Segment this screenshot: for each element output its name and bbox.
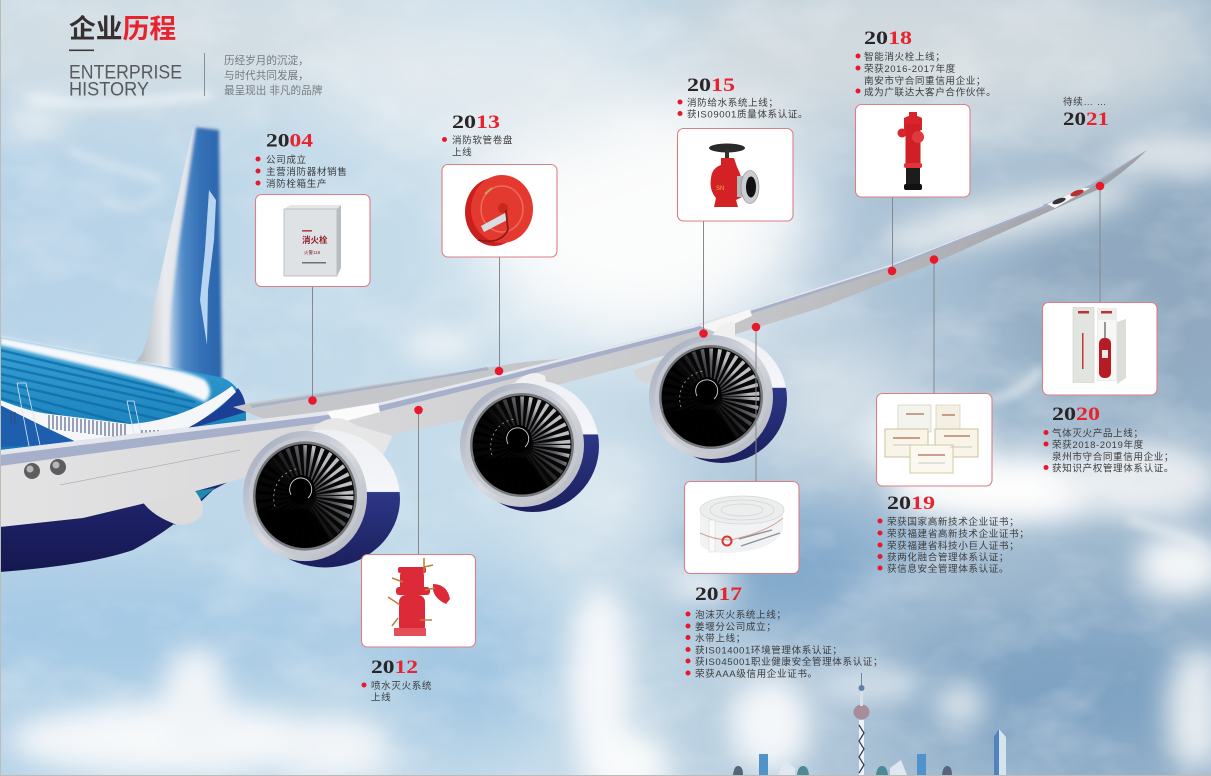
details 2018: 成为广联达大客户合作伙伴。 [864, 86, 996, 98]
english heading: HISTORY [69, 78, 149, 100]
city skyline [733, 673, 1006, 775]
details 2020: 获知识产权管理体系认证。 [1052, 462, 1174, 474]
slogan: 与时代共同发展， [224, 69, 309, 82]
year 2012: 20 12 [371, 658, 418, 678]
details 2019: 荣获福建省高新技术企业证书； [887, 528, 1029, 540]
card: deluge valve [362, 554, 476, 647]
fuselage [0, 337, 246, 455]
slogan [224, 54, 323, 97]
card: fire hose [684, 482, 799, 574]
details 2015: 消防给水系统上线； [687, 97, 779, 109]
details 2013 [442, 134, 513, 158]
details 2018: 智能消火栓上线； [864, 51, 945, 63]
details 2017 [686, 609, 883, 680]
engine 1 [243, 418, 400, 568]
windows [11, 412, 170, 438]
year 2004: 20 04 [266, 132, 313, 152]
details 2017: 获IS014001环境管理体系认证； [695, 644, 842, 656]
slogan: 历经岁月的沉淀， [224, 54, 309, 67]
far wing section [233, 358, 570, 432]
english heading [69, 62, 182, 100]
details 2019: 获两化融合管理体系认证； [887, 552, 1009, 564]
title block [69, 14, 323, 100]
details 2017: 获IS045001职业健康安全管理体系认证； [695, 656, 883, 668]
details 2012: 喷水灭火系统 [371, 680, 432, 692]
details 2017: 泡沫灭火系统上线； [695, 609, 787, 621]
milestone 2017 [684, 323, 883, 680]
details 2020: 荣获2018-2019年度 [1052, 439, 1144, 451]
year 2019: 20 19 [887, 494, 935, 514]
doors [17, 383, 143, 446]
fuselage underside [0, 470, 250, 572]
details 2017: 姜堰分公司成立； [695, 621, 776, 633]
card: hydrant cabinet: 火警119 [304, 249, 321, 256]
tail fin [133, 125, 222, 380]
card: certificates [876, 394, 992, 486]
card: hose reel [442, 164, 557, 257]
details 2018: 南安市守合同重信用企业； [864, 75, 986, 87]
details 2018: 荣获2016-2017年度 [864, 63, 956, 75]
milestone 2004 [256, 132, 370, 405]
milestone 2018 [856, 29, 996, 275]
card: outdoor hydrant [856, 104, 970, 197]
year 2015: 20 15 [687, 76, 735, 96]
milestone 2021 [1063, 96, 1109, 302]
details 2013: 上线 [452, 146, 472, 158]
milestone 2019 [876, 255, 1029, 575]
milestone 2015 [678, 76, 808, 338]
details 2012 [362, 680, 432, 704]
details 2019: 获信息安全管理体系认证。 [887, 563, 1009, 575]
slogan: 最呈现出 非凡的品牌 [224, 84, 323, 97]
card: fire valve [678, 128, 793, 221]
details 2015 [678, 97, 808, 120]
card: hydrant cabinet [256, 194, 370, 286]
engine 3 [634, 322, 787, 463]
details 2004: 主营消防器材销售 [266, 166, 347, 178]
details 2020: 气体灭火产品上线； [1052, 428, 1144, 440]
note: to be continued: 待续… … [1063, 96, 1107, 108]
details 2013: 消防软管卷盘 [452, 134, 513, 146]
year 2018: 20 18 [864, 29, 912, 49]
milestone 2013 [442, 113, 557, 375]
details 2020 [1044, 428, 1174, 474]
near wing [0, 150, 1147, 527]
card: hydrant cabinet: 消火栓 [302, 235, 328, 245]
details 2020: 泉州市守合同重信用企业； [1052, 451, 1174, 463]
details 2012: 上线 [371, 692, 391, 704]
title: 企业历程 [69, 14, 176, 44]
details 2004: 消防栓箱生产 [266, 178, 327, 190]
details 2019 [878, 516, 1029, 575]
english heading: ENTERPRISE [69, 62, 182, 84]
details 2018 [856, 51, 996, 98]
year 2017: 20 17 [695, 585, 742, 605]
milestone 2012 [362, 406, 476, 704]
belly fairing [140, 491, 203, 525]
year 2021: 2021 [1063, 110, 1109, 130]
airplane [0, 125, 1147, 572]
details 2019: 荣获国家高新技术企业证书； [887, 516, 1019, 528]
details 2004 [256, 154, 347, 190]
details 2017: 水带上线； [695, 632, 746, 644]
year 2013: 20 13 [452, 113, 500, 133]
card: gas extinguishing cabinet [1042, 302, 1157, 395]
details 2004: 公司成立 [266, 154, 307, 166]
milestone 2020 [1042, 302, 1174, 474]
year 2020: 20 20 [1052, 405, 1100, 425]
details 2017: 荣获AAA级信用企业证书。 [695, 668, 818, 680]
card: fire valve: SN [716, 186, 724, 192]
engine 2 [460, 373, 599, 512]
details 2019: 荣获福建省科技小巨人证书； [887, 540, 1019, 552]
details 2015: 获IS09001质量体系认证。 [687, 108, 808, 120]
